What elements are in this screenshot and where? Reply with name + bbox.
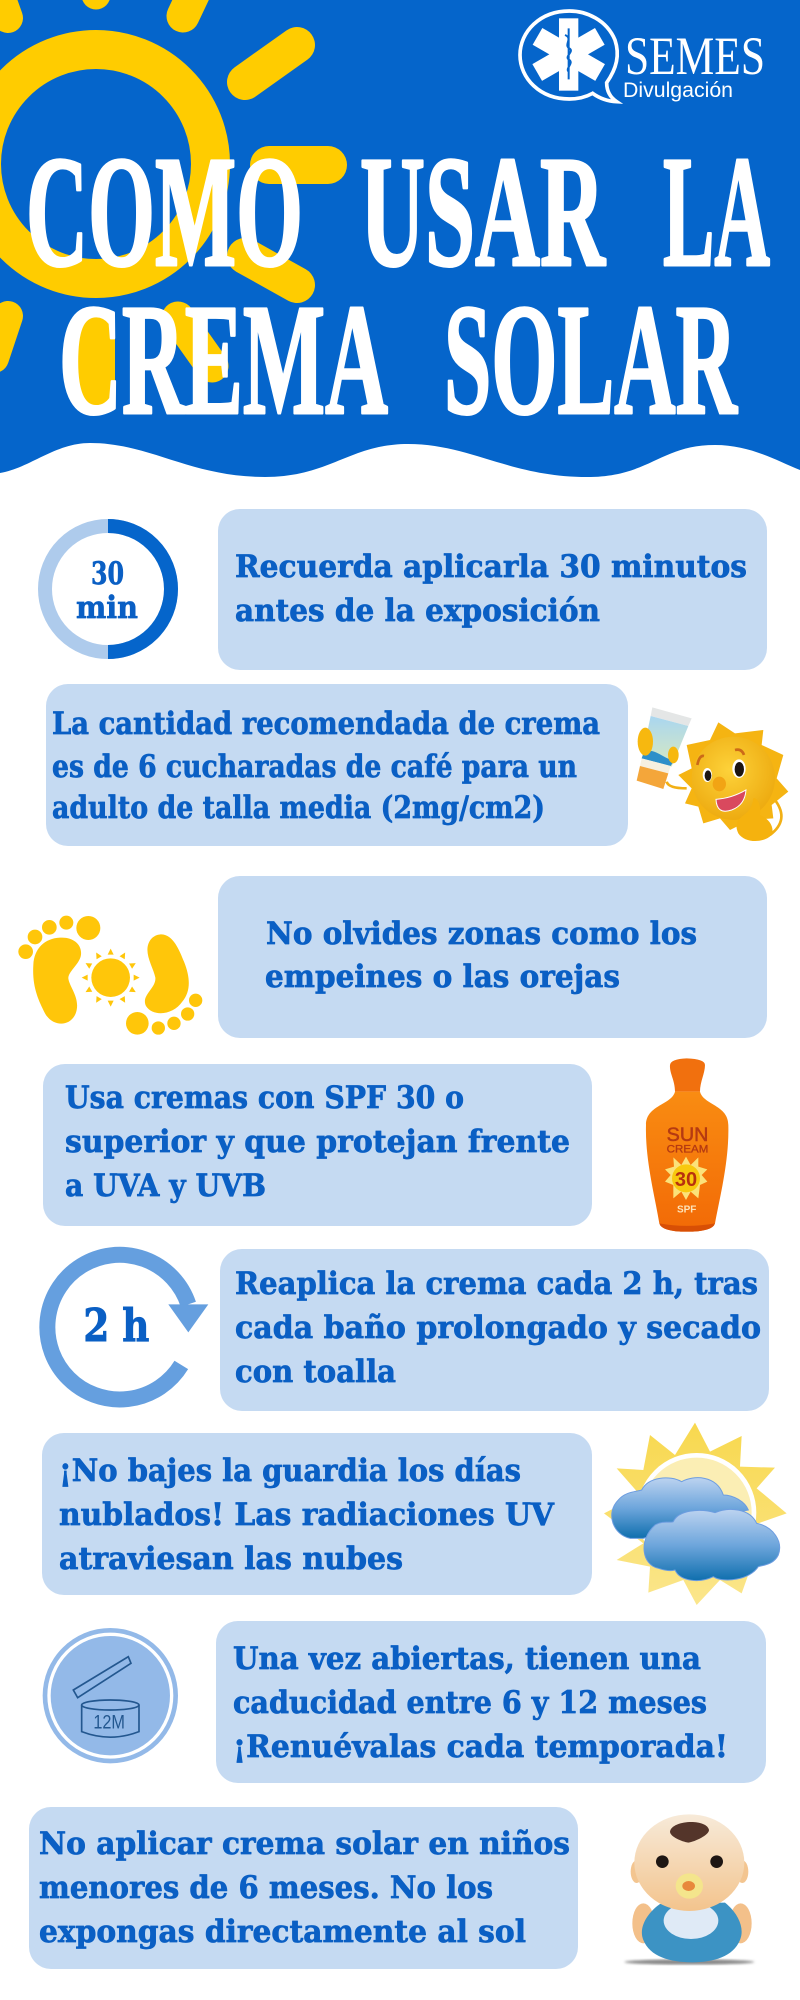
panel: cantidad recomendada: es de 6 cucharadas de café para un: [52, 749, 577, 785]
panel: SPF 30: superior y que protejan frente: [65, 1124, 570, 1160]
panel: aplicar 30 minutos antes: [218, 509, 767, 670]
title: COMO: [26, 124, 303, 300]
icon: sun character holding sunscreen tube: [637, 707, 788, 841]
panel: niños menores de 6 meses: No aplicar crema solar en niños: [39, 1826, 570, 1862]
icon: 30 min timer: min: [76, 590, 138, 626]
icon: period-after-opening 12M: [43, 1628, 178, 1763]
icon: 30 min timer: 30: [91, 556, 124, 592]
panel: niños menores de 6 meses: [29, 1807, 578, 1969]
panel: días nublados: [42, 1433, 592, 1595]
panel: cantidad recomendada: [46, 684, 628, 846]
logo wordmark: SEMES: [625, 26, 765, 86]
panel: días nublados: atraviesan las nubes: [59, 1541, 403, 1577]
logo subtitle: Divulgación: [623, 79, 733, 102]
icon: sunscreen bottle: SUN: [667, 1125, 708, 1146]
panel: días nublados: nublados! Las radiaciones UV: [59, 1497, 555, 1533]
icon: 2 h reapply arrow: 2 h: [83, 1299, 149, 1352]
panel: aplicar 30 minutos antes: Recuerda aplicarla 30 minutos: [235, 549, 747, 585]
icon: large sun: [0, 0, 328, 390]
logo: SEMES Divulgación: [520, 11, 765, 102]
panel: SPF 30: [43, 1064, 592, 1226]
wave edge: [0, 443, 800, 492]
icon: sunscreen bottle: SPF: [677, 1204, 696, 1215]
panel: SPF 30: a UVA y UVB: [65, 1168, 266, 1204]
panel: empeines y orejas: [218, 876, 767, 1038]
icon: speech bubble with star of life: [520, 11, 617, 102]
panel: reaplicar: [220, 1249, 769, 1411]
icon: baby with pacifier: [624, 1814, 754, 1965]
panel: reaplicar: con toalla: [235, 1354, 396, 1390]
icon: footprints with sun: [18, 916, 202, 1035]
panel: caducidad: caducidad entre 6 y 12 meses: [233, 1685, 707, 1721]
panel: niños menores de 6 meses: menores de 6 meses. No los: [39, 1870, 493, 1906]
panel: empeines y orejas: No olvides zonas como los: [266, 916, 697, 952]
icon: period-after-opening 12M: 12M: [93, 1712, 125, 1733]
panel: días nublados: ¡No bajes la guardia los días: [59, 1453, 521, 1489]
icon: sunscreen bottle: 30: [675, 1169, 697, 1191]
panel: caducidad: [216, 1621, 766, 1783]
panel: reaplicar: Reaplica la crema cada 2 h, tras: [235, 1266, 758, 1302]
panel: niños menores de 6 meses: expongas directamente al sol: [39, 1914, 526, 1950]
title: CREMA: [59, 272, 388, 448]
panel: aplicar 30 minutos antes: antes de la exposición: [235, 593, 600, 629]
icon: sunscreen bottle: CREAM: [667, 1144, 708, 1156]
icon: sunscreen bottle: [646, 1058, 728, 1232]
panel: empeines y orejas: empeines o las orejas: [265, 959, 620, 995]
panel: caducidad: Una vez abiertas, tienen una: [233, 1641, 701, 1677]
title: [26, 124, 770, 448]
panel: reaplicar: cada baño prolongado y secado: [235, 1310, 761, 1346]
panel: cantidad recomendada: La cantidad recomendada de crema: [52, 706, 600, 742]
header background: [0, 0, 800, 492]
panel: SPF 30: Usa cremas con SPF 30 o: [65, 1080, 464, 1116]
panel: cantidad recomendada: adulto de talla media (2mg/cm2): [52, 790, 545, 826]
title: USAR: [360, 124, 606, 300]
panel: caducidad: ¡Renuévalas cada temporada!: [233, 1729, 728, 1765]
icon: 2 h reapply arrow: [47, 1255, 208, 1399]
icon: 30 min timer: [45, 526, 171, 652]
icon: sun behind clouds: [604, 1423, 787, 1605]
